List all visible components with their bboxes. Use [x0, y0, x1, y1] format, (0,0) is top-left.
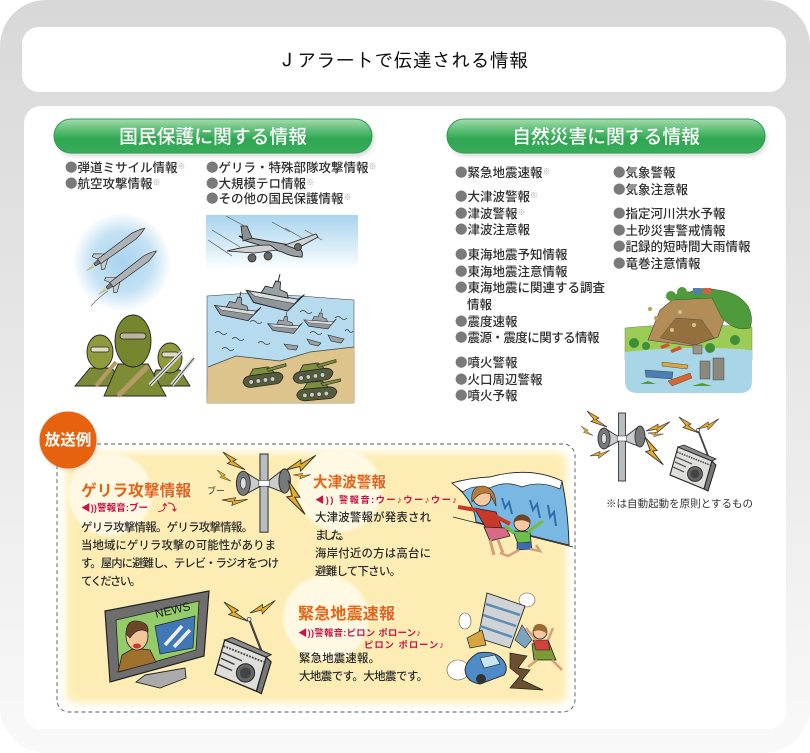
list: national protection column 2: ※	[306, 177, 314, 188]
example: guerrilla attack: ゲリラ攻撃情報	[81, 481, 191, 500]
illustration: siren with bolts	[207, 446, 316, 532]
list: natural disasters column 1: ●緊急地震速報	[455, 162, 543, 181]
example: guerrilla attack: す。屋内に避難し、テレビ・ラジオをつけ	[81, 556, 279, 570]
illustration: siren with bolts: ブー	[207, 485, 225, 496]
heading: national protection	[54, 119, 374, 156]
illustration: television news: NEWS	[154, 599, 192, 621]
example: major tsunami warning	[313, 473, 457, 578]
example: earthquake early warning	[298, 605, 444, 683]
list: natural disasters column 1: ●東海地震注意情報	[455, 261, 568, 280]
illustration: loudspeaker	[581, 411, 670, 481]
list: natural disasters column 1: ※	[518, 207, 526, 218]
badge: broadcast example	[40, 412, 97, 470]
list: natural disasters column 1: ●噴火警報	[455, 352, 518, 371]
example: earthquake early warning: 緊急地震速報。	[299, 651, 380, 665]
example: major tsunami warning: ◀)) 警報音:ウー♪ウー♪ウー♪	[315, 494, 457, 505]
example: major tsunami warning: 海岸付近の方は高台に	[315, 546, 431, 560]
list: national protection column 2	[206, 157, 376, 207]
heading: national protection: 国民保護に関する情報	[119, 126, 307, 147]
panel: broadcast examples	[40, 412, 575, 712]
illustration: missiles	[72, 212, 172, 312]
illustration: portable radio	[215, 593, 275, 694]
main white panel	[24, 106, 786, 729]
list: natural disasters column 1: ●大津波警報	[455, 186, 530, 205]
list: natural disasters column 1: ●東海地震に関連する調査	[455, 277, 606, 296]
list: national protection column 2: ●その他の国民保護情報	[206, 188, 344, 207]
list: national protection column 1: ●航空攻撃情報	[65, 173, 153, 192]
list: natural disasters column 1: ●東海地震予知情報	[455, 244, 568, 263]
list: national protection column 1: ※	[153, 177, 161, 188]
example: major tsunami warning: 大津波警報	[313, 473, 386, 491]
illustration: collapsed building, car and crack	[447, 593, 562, 690]
example: guerrilla attack: てください。	[81, 575, 141, 588]
illustration: landslide and flood	[625, 287, 752, 393]
list: natural disasters column 1: ●震度速報	[455, 311, 518, 330]
example: major tsunami warning: ました。	[315, 529, 350, 542]
list: natural disasters column 1: ※	[543, 166, 551, 177]
illustration: tsunami and fleeing people	[452, 472, 573, 556]
example: earthquake early warning: 大地震です。大地震です。	[299, 669, 428, 683]
list: natural disasters column 1: ●噴火予報	[455, 385, 518, 404]
list: natural disasters column 2: ●気象注意報	[613, 179, 689, 198]
illustration: armed guerrillas	[75, 315, 194, 396]
heading: natural disasters: 自然災害に関する情報	[512, 125, 700, 147]
heading: natural disasters	[447, 119, 767, 156]
note: auto-activation: ※は自動起動を原則とするもの	[606, 497, 753, 510]
list: natural disasters column 2: ●指定河川洪水予報	[613, 203, 726, 222]
list: national protection column 2: ●大規模テロ情報	[206, 173, 306, 192]
example: guerrilla attack: ゲリラ攻撃情報。ゲリラ攻撃情報。	[81, 520, 253, 534]
title bar	[22, 27, 786, 92]
example: earthquake early warning: ◀))警報音:ピロン ポローン♪	[298, 627, 421, 638]
list: natural disasters column 1: ●震源・震度に関する情報	[455, 327, 600, 346]
illustration: aircraft	[206, 215, 358, 270]
list: natural disasters column 1: ●火口周辺警報	[455, 369, 543, 388]
illustration: ships and tanks	[207, 267, 354, 403]
list: natural disasters column 1: ●津波警報	[455, 203, 518, 222]
list: natural disasters column 1	[455, 162, 606, 404]
example: major tsunami warning: 大津波警報が発表され	[315, 510, 432, 524]
illustration: television news	[105, 591, 209, 688]
list: natural disasters column 2: ●土砂災害警戒情報	[613, 220, 726, 239]
list: national protection column 2: ●ゲリラ・特殊部隊攻撃情報	[206, 157, 369, 176]
list: natural disasters column 1: ※	[530, 190, 538, 201]
list: national protection column 1: ●弾道ミサイル情報	[65, 157, 178, 176]
example: earthquake early warning: ピロン ポローン♪	[364, 640, 444, 650]
list: national protection column 2: ※	[368, 161, 376, 172]
list: natural disasters column 1: ●津波注意報	[455, 219, 531, 238]
list: national protection column 2: ※	[344, 192, 352, 203]
list: national protection column 1	[65, 157, 186, 192]
list: natural disasters column 2: ●気象警報	[613, 162, 676, 181]
list: natural disasters column 2: ●竜巻注意情報	[613, 253, 701, 272]
list: natural disasters column 2: ●記録的短時間大雨情報	[613, 236, 751, 255]
list: natural disasters column 2	[613, 162, 751, 272]
badge: broadcast example: 放送例	[45, 431, 91, 449]
example: guerrilla attack: ◀))警報音:ブー ⤴⤵	[81, 502, 177, 514]
list: national protection column 1: ※	[178, 161, 186, 172]
example: guerrilla attack: 当地域にゲリラ攻撃の可能性がありま	[81, 538, 276, 552]
title bar: Ｊアラートで伝達される情報	[278, 50, 528, 70]
example: guerrilla attack	[81, 481, 279, 588]
example: major tsunami warning: 避難して下さい。	[315, 564, 401, 578]
illustration: radio	[670, 413, 719, 491]
example: earthquake early warning: 緊急地震速報	[298, 605, 395, 623]
list: natural disasters column 1: 情報	[467, 297, 493, 312]
